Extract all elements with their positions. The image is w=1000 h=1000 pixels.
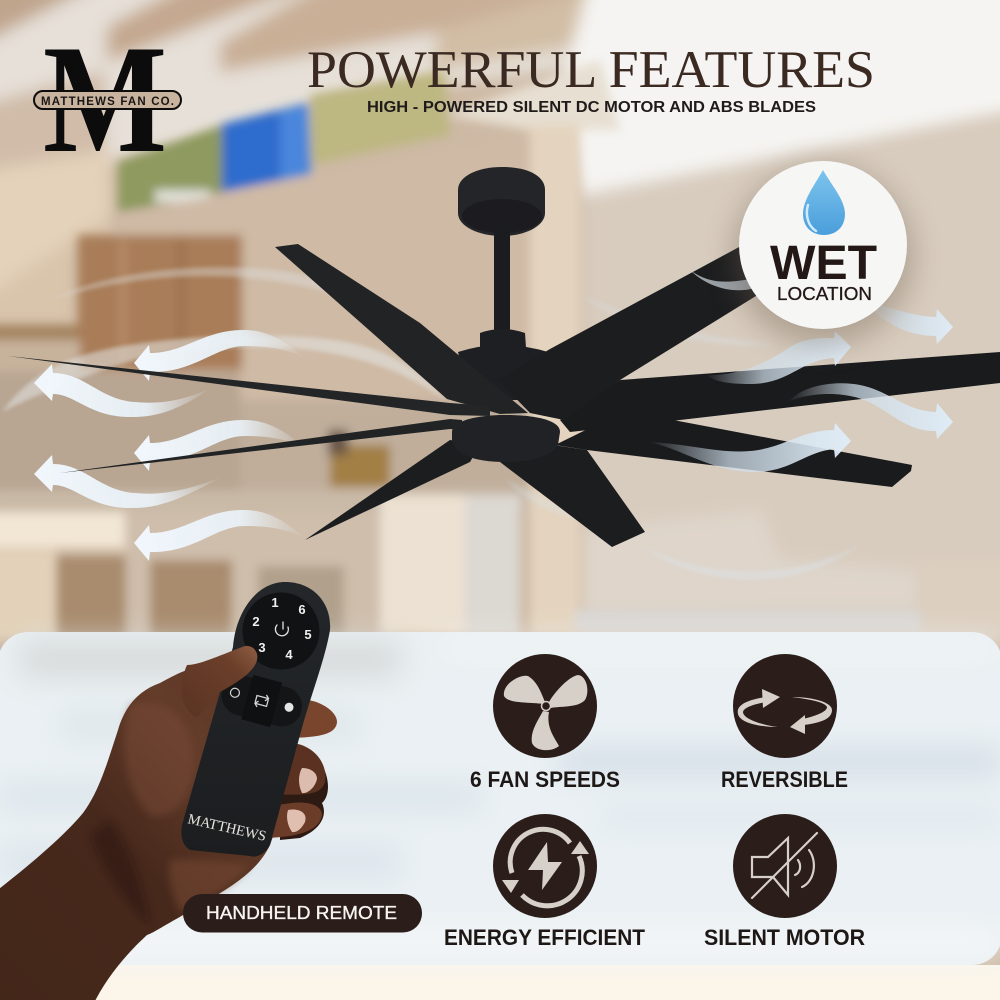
remote brand: MATTHEWS <box>186 811 268 845</box>
airflow arrows right <box>647 270 953 472</box>
finger one <box>280 698 337 738</box>
button numbers: 1 <box>271 595 279 610</box>
dial <box>242 592 320 670</box>
feature: energy efficient <box>444 814 646 950</box>
button numbers: 5 <box>304 627 312 642</box>
airflow arrows left <box>34 330 305 561</box>
feature: 6 fan speeds <box>470 654 620 792</box>
label: ENERGY EFFICIENT <box>444 925 646 950</box>
power icon <box>275 622 288 636</box>
logo <box>34 13 181 185</box>
faint air swooshes behind fan <box>2 267 860 580</box>
lower left blade <box>305 440 480 540</box>
motor collar and dome <box>458 329 548 400</box>
downrod <box>494 222 510 332</box>
button numbers: 3 <box>258 640 266 655</box>
long right blade <box>560 352 1000 432</box>
button numbers: 4 <box>285 647 293 662</box>
thin left blades over arrows <box>8 356 490 473</box>
arrow second right <box>706 331 851 384</box>
feature: reversible <box>721 654 848 792</box>
monogram M: M <box>43 13 167 185</box>
finger base shadow <box>280 740 328 840</box>
wet location badge <box>733 161 913 346</box>
icon: energy bolt <box>493 814 597 918</box>
arrow C <box>134 420 305 471</box>
swoosh on upper blade <box>690 270 755 290</box>
button numbers: 6 <box>298 602 306 617</box>
arm and palm <box>0 667 300 1000</box>
ceiling fan <box>275 167 1000 547</box>
nail three <box>287 810 306 832</box>
icon: muted speaker <box>733 814 837 918</box>
location label: LOCATION <box>777 284 872 304</box>
lower right blade <box>555 420 912 487</box>
icon: rotation arrows <box>733 654 837 758</box>
arrow fourth right <box>647 423 851 472</box>
lower blade <box>500 440 645 547</box>
icon: fan <box>493 654 597 758</box>
button numbers <box>252 595 312 662</box>
finger two <box>270 742 325 795</box>
arrow third right <box>788 383 953 439</box>
glass feature panel <box>0 632 1000 1000</box>
arrow B <box>34 364 213 417</box>
label: 6 FAN SPEEDS <box>470 767 620 792</box>
icon: water drop <box>803 170 845 235</box>
brand band <box>34 91 181 109</box>
arrow E <box>134 510 305 561</box>
palm heel highlight <box>169 859 250 912</box>
hub <box>452 415 560 462</box>
feature: silent motor <box>704 814 865 950</box>
nail two <box>299 768 317 793</box>
label: SILENT MOTOR <box>704 925 865 950</box>
knuckle highlight <box>124 703 195 816</box>
title: POWERFUL FEATURES <box>307 41 875 99</box>
finger three <box>265 802 322 838</box>
button numbers: 2 <box>252 614 260 629</box>
wet label: WET <box>770 237 877 290</box>
function buttons <box>216 668 307 734</box>
brand band: MATTHEWS FAN CO. <box>41 96 174 108</box>
upper left blade <box>275 244 528 414</box>
arrow A <box>134 330 305 381</box>
handheld remote pill: HANDHELD REMOTE <box>206 903 397 923</box>
hand holding remote <box>0 667 337 1000</box>
wrist shadow <box>90 820 150 925</box>
remote body <box>181 582 330 857</box>
handheld remote pill <box>183 894 422 932</box>
arrow D <box>34 455 225 508</box>
label: REVERSIBLE <box>721 767 848 792</box>
remote control <box>181 582 330 857</box>
thumb <box>182 646 257 717</box>
arrow upper right <box>862 303 953 344</box>
subtitle: HIGH - POWERED SILENT DC MOTOR AND ABS BLADES <box>367 99 816 116</box>
upper right blade <box>498 225 790 420</box>
canopy <box>458 167 545 236</box>
